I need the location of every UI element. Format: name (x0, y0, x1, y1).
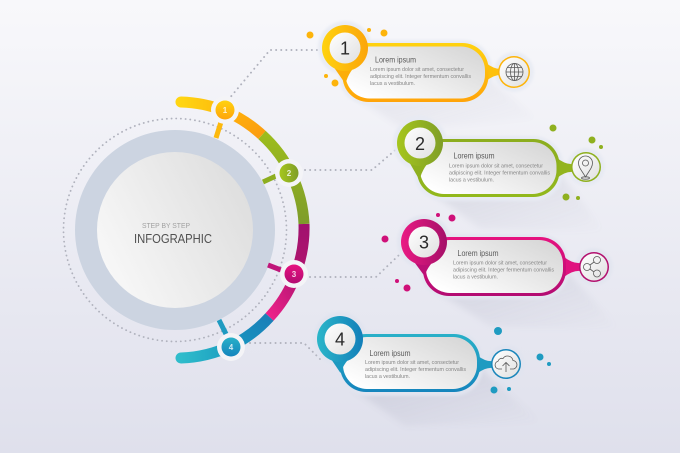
central circle (64, 118, 286, 342)
body text: Lorem ipsum dolor sit amet, consectetur (449, 164, 543, 170)
title: Lorem ipsum (375, 54, 416, 64)
icon: globe (506, 64, 523, 80)
icon circle (579, 252, 609, 282)
connector (564, 257, 581, 277)
tail (408, 157, 434, 180)
panel: step 4 (313, 312, 540, 426)
connector (557, 158, 573, 178)
body text: lacus a vestibulum. (449, 178, 494, 184)
shadow (358, 78, 535, 130)
body text (449, 164, 550, 184)
panel: step 3 (397, 215, 620, 330)
node 2: 2 (287, 169, 292, 178)
card body (426, 240, 563, 293)
card border (340, 334, 480, 392)
grey-blue ring (75, 130, 275, 330)
body text (365, 360, 466, 380)
halo (318, 21, 534, 105)
body text: lacus a vestibulum. (370, 81, 415, 87)
icon: share (584, 256, 600, 277)
shadow (438, 270, 620, 330)
dotted connector lines (228, 50, 400, 361)
body text (370, 67, 471, 87)
body text: adipiscing elit. Integer fermentum convallis (449, 170, 550, 176)
pin (317, 316, 363, 362)
number: 4 (335, 330, 345, 350)
title: Lorem ipsum (458, 248, 498, 258)
node 3 (280, 260, 308, 288)
icon circle (498, 56, 530, 88)
connector (478, 356, 493, 373)
shadow (432, 172, 605, 232)
shadow (352, 368, 540, 426)
dots: step 4 (490, 327, 551, 394)
eyebrow: step by step: STEP BY STEP (142, 221, 190, 230)
panel: step 2 (393, 116, 605, 232)
body text: lacus a vestibulum. (453, 274, 498, 280)
body text: Lorem ipsum dolor sit amet, consectetur (365, 360, 459, 366)
heading: infographic: INFOGRAPHIC (134, 232, 212, 246)
body text (453, 260, 554, 280)
body text: lacus a vestibulum. (365, 374, 410, 380)
body text: Lorem ipsum dolor sit amet, consectetur (453, 260, 547, 266)
card body (343, 337, 477, 389)
number: 2 (415, 134, 425, 154)
tail (412, 256, 439, 276)
pin (322, 25, 368, 71)
node 3: 3 (292, 270, 297, 279)
card body (346, 46, 485, 98)
connector (486, 63, 503, 81)
node 4 (217, 333, 245, 361)
halo (393, 116, 605, 201)
dots: step 1 (306, 28, 388, 86)
icon circle (491, 349, 521, 379)
icon: cloud upload (495, 356, 517, 372)
icon circle (571, 152, 601, 182)
tail (329, 353, 355, 373)
dots: step 2 (550, 124, 603, 200)
pin (397, 120, 443, 166)
node 1 (211, 96, 239, 124)
node 4: 4 (229, 343, 234, 352)
number: 3 (419, 232, 429, 252)
halo (313, 312, 525, 396)
spokes (216, 122, 281, 334)
body text: adipiscing elit. Integer fermentum convallis (453, 268, 554, 274)
halo (397, 215, 613, 299)
body text: adipiscing elit. Integer fermentum convallis (370, 74, 471, 80)
card body (420, 142, 556, 194)
card border (423, 237, 566, 296)
title: Lorem ipsum (454, 150, 494, 160)
panel: step 1 (318, 21, 535, 130)
dotted orbit (64, 118, 286, 342)
node 1: 1 (223, 106, 228, 115)
node 2 (275, 159, 303, 187)
pin (401, 219, 447, 265)
segmented arc (181, 102, 304, 358)
white disc (97, 152, 253, 308)
title: Lorem ipsum (370, 348, 410, 358)
body text: adipiscing elit. Integer fermentum convallis (365, 367, 466, 373)
tail (333, 62, 360, 84)
dots: step 3 (382, 213, 456, 292)
card border (342, 43, 488, 102)
icon: location pin (578, 156, 592, 179)
card border (417, 139, 560, 197)
body text: Lorem ipsum dolor sit amet, consectetur (370, 67, 464, 73)
number: 1 (340, 38, 350, 58)
